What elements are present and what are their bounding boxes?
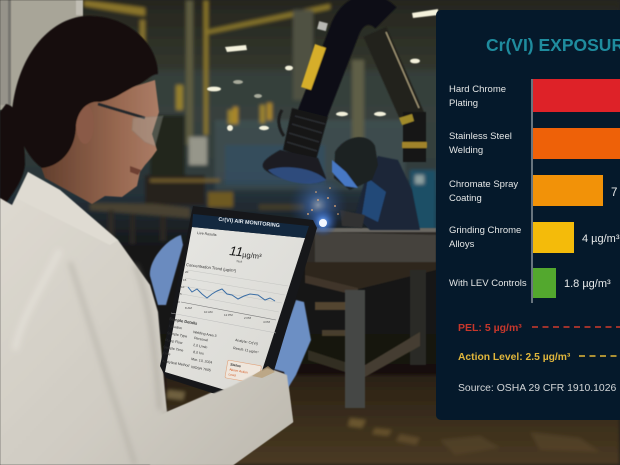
sample details: Result: 11 µg/m³ bbox=[233, 346, 259, 355]
trend chart: 10 bbox=[181, 285, 185, 289]
row: with LEV controls bbox=[449, 268, 611, 298]
control box bbox=[189, 137, 207, 165]
safety glasses bbox=[98, 104, 163, 146]
row: stainless steel welding: Welding bbox=[449, 145, 483, 156]
sample details: Mar. 10, 2024 bbox=[191, 357, 213, 365]
sample details: Analytical Method bbox=[162, 359, 190, 368]
row: grinding chrome alloys: Alloys bbox=[449, 239, 475, 250]
ceiling lights bbox=[207, 9, 438, 131]
row: hard chrome plating bbox=[449, 79, 620, 112]
status box: Above Action bbox=[229, 367, 248, 375]
sample details: Date bbox=[163, 351, 171, 356]
row: with LEV controls: 1.8 µg/m³ bbox=[564, 278, 611, 290]
status box: Level bbox=[228, 372, 237, 378]
tablet: Cr(VI) AIR MONITORING bbox=[218, 217, 280, 229]
welder bbox=[332, 137, 420, 230]
trend chart: 20 bbox=[185, 270, 189, 274]
row: stainless steel welding: Stainless Steel bbox=[449, 131, 512, 142]
yellow roof beams bbox=[84, 0, 145, 16]
source: Source: OSHA 29 CFR 1910.1026 bbox=[458, 383, 616, 394]
sample details: 2.0 L/min bbox=[193, 343, 208, 349]
tablet: µg/m³ bbox=[242, 250, 262, 261]
row: grinding chrome alloys bbox=[449, 222, 620, 253]
left wall bbox=[0, 0, 83, 110]
trend chart: 10 AM bbox=[204, 310, 213, 314]
reading: 11 µg/m³: 11 bbox=[229, 243, 244, 259]
status box bbox=[225, 360, 261, 384]
sample details bbox=[162, 316, 259, 372]
trend chart bbox=[178, 262, 288, 324]
welding table and steel stand bbox=[300, 228, 436, 408]
sample details: Pump Flow bbox=[165, 338, 183, 345]
tablet bbox=[160, 206, 317, 404]
tablet screen bbox=[165, 227, 305, 390]
row: chromate spray coating: Chromate Spray bbox=[449, 179, 518, 190]
hair bbox=[12, 16, 158, 168]
sample details: 8.0 hrs bbox=[193, 350, 204, 356]
trend chart: 2 PM bbox=[244, 316, 252, 320]
panel background bbox=[436, 10, 620, 420]
live results: Live Results bbox=[197, 231, 217, 237]
tablet body bbox=[160, 206, 317, 404]
trend chart: Concentration Trend (µg/m³) bbox=[186, 262, 237, 273]
trend chart: 0 bbox=[178, 300, 180, 304]
sample details: Sample Type bbox=[167, 331, 188, 339]
sample details: Welding Area 3 bbox=[193, 330, 217, 338]
row: grinding chrome alloys: 4 µg/m³ bbox=[582, 233, 620, 245]
trend chart: 4 PM bbox=[263, 320, 271, 324]
row: with LEV controls: With LEV Controls bbox=[449, 278, 527, 289]
PEL reference line: PEL: 5 µg/m³ bbox=[458, 322, 522, 334]
lab coat bbox=[0, 172, 293, 465]
blue cabinet at right of welder bbox=[410, 170, 436, 230]
sample details: Personal bbox=[194, 336, 208, 342]
row: hard chrome plating: Plating bbox=[449, 98, 478, 109]
woman: face and neck bbox=[0, 16, 159, 206]
sample details: Analyte: Cr(VI) bbox=[235, 338, 258, 346]
row: stainless steel welding bbox=[449, 128, 620, 159]
tablet: Task bbox=[236, 259, 243, 264]
gloved hands bbox=[150, 235, 311, 388]
chart axis bbox=[531, 79, 533, 303]
welding arc and sparks bbox=[288, 175, 348, 237]
row: hard chrome plating: Hard Chrome bbox=[449, 84, 506, 95]
sample details: NIOSH 7605 bbox=[191, 365, 211, 372]
sample details: Sample Time bbox=[163, 345, 184, 353]
fume extraction arm bbox=[263, 10, 427, 184]
icon: ear bbox=[76, 104, 94, 144]
tablet header bar bbox=[192, 214, 309, 238]
trend chart: 8 AM bbox=[185, 306, 192, 310]
benches background bbox=[150, 179, 220, 182]
trend chart: 5 bbox=[180, 292, 182, 296]
ponytail bbox=[0, 104, 25, 206]
trend chart: 15 bbox=[183, 278, 187, 282]
floor bbox=[165, 375, 620, 465]
row: chromate spray coating: Coating bbox=[449, 193, 482, 204]
sample details: Sample Details bbox=[169, 316, 198, 326]
sample details: Location bbox=[169, 324, 183, 330]
row: grinding chrome alloys: Grinding Chrome bbox=[449, 225, 521, 236]
sleeve over tablet bbox=[150, 368, 293, 465]
trend chart: 12 PM bbox=[224, 313, 233, 317]
row: chromate spray coating bbox=[449, 175, 620, 206]
status box: Status bbox=[230, 362, 241, 368]
action level reference line: Action Level: 2.5 µg/m³ bbox=[458, 352, 571, 363]
